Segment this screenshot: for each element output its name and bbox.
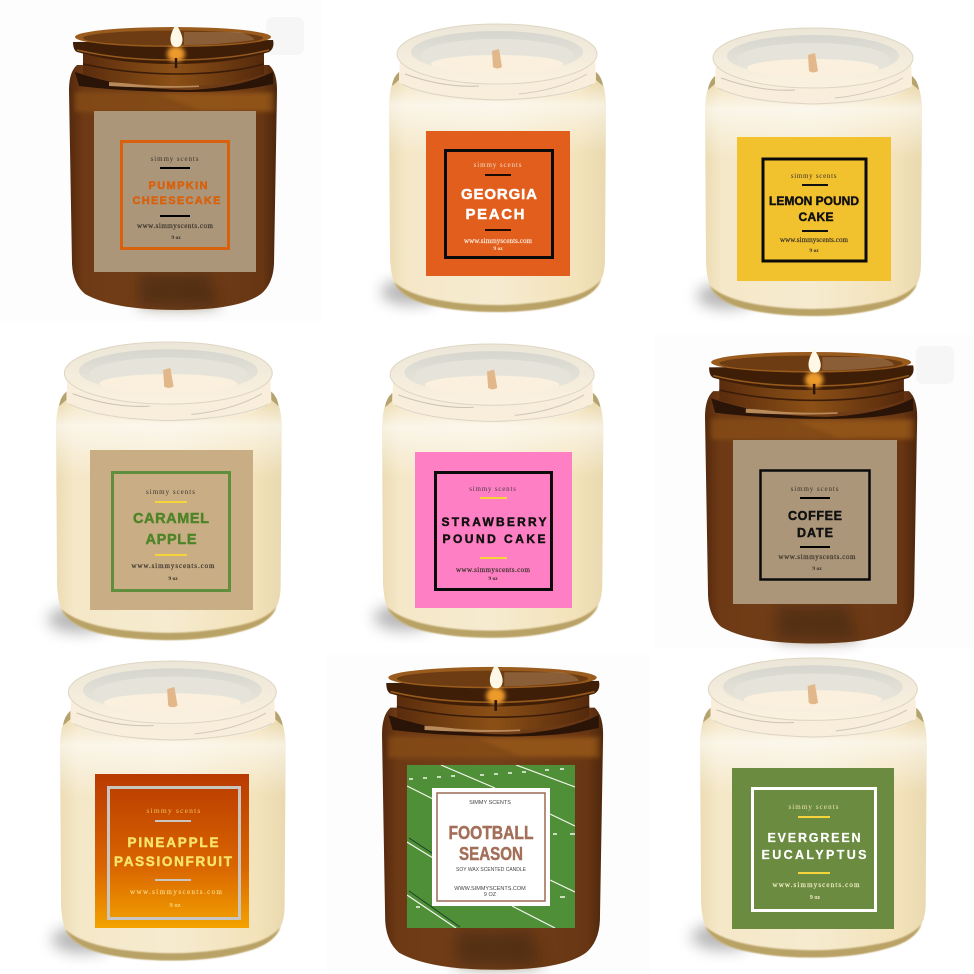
candle: caramel apple: 9 oz [168, 576, 178, 582]
candle: coffee date: DATE [797, 526, 833, 540]
candle: pineapple passionfruit [52, 661, 286, 961]
candle: lemon pound cake: CAKE [798, 210, 834, 224]
candle: pineapple passionfruit: 9 oz [169, 902, 181, 909]
candle: coffee date: COFFEE [788, 509, 842, 523]
candle: pumpkin cheesecake: CHEESECAKE [132, 195, 220, 207]
background patch: middle right [654, 335, 974, 648]
background patch: top left [0, 0, 321, 321]
candle: caramel apple: APPLE [146, 532, 197, 548]
candle: pumpkin cheesecake: 9 oz [171, 235, 181, 241]
candle: pumpkin cheesecake [69, 24, 277, 310]
candle: coffee date: www.simmyscents.com [778, 553, 856, 561]
candle: evergreen eucalyptus [692, 658, 927, 958]
candle: coffee date: 9 oz [812, 566, 822, 572]
candle: strawberry pound cake: STRAWBERRY [442, 515, 546, 529]
candle: pineapple passionfruit: www.simmyscents.com [130, 888, 223, 896]
candle: lemon pound cake [697, 28, 922, 316]
candle: caramel apple: simmy scents [146, 488, 196, 496]
candle: football season: WWW.SIMMYSCENTS.COM [454, 886, 526, 892]
candle: georgia peach: GEORGIA [461, 186, 537, 203]
candle: pumpkin cheesecake: simmy scents [151, 155, 199, 163]
candle: pumpkin cheesecake: www.simmyscents.com [137, 222, 214, 230]
faint square: middle right [916, 346, 954, 384]
candle: strawberry pound cake: 9 oz [488, 576, 498, 582]
candle: evergreen eucalyptus: EUCALYPTUS [762, 848, 866, 862]
candle: lemon pound cake: www.simmyscents.com [780, 236, 849, 244]
candle: evergreen eucalyptus: www.simmyscents.com [772, 881, 860, 889]
candle: football season: SEASON [459, 844, 523, 864]
candle: georgia peach: PEACH [466, 206, 524, 223]
candle: evergreen eucalyptus: 9 oz [810, 895, 820, 901]
candle: caramel apple: www.simmyscents.com [132, 562, 215, 570]
football field label [407, 765, 575, 928]
candle: strawberry pound cake: simmy scents [469, 485, 517, 493]
candle: coffee date: simmy scents [791, 485, 839, 493]
candle: georgia peach: 9 oz [493, 246, 503, 252]
candle: georgia peach: www.simmyscents.com [464, 237, 533, 245]
candle: caramel apple: CARAMEL [133, 511, 209, 527]
candle: strawberry pound cake [374, 344, 603, 638]
candle: football season: FOOTBALL [448, 823, 534, 843]
candle: pineapple passionfruit: simmy scents [146, 806, 202, 815]
candle: pumpkin cheesecake: PUMPKIN [148, 180, 208, 192]
candle: strawberry pound cake: www.simmyscents.com [456, 566, 531, 574]
candle: football season [382, 664, 603, 970]
candle: georgia peach [381, 24, 606, 312]
candle: georgia peach: simmy scents [474, 161, 522, 169]
candle: lemon pound cake: simmy scents [791, 172, 837, 180]
candle: evergreen eucalyptus: EVERGREEN [768, 831, 860, 845]
candle: strawberry pound cake: POUND CAKE [442, 532, 546, 546]
candle: caramel apple [48, 342, 282, 640]
candle: pineapple passionfruit: PINEAPPLE [128, 835, 218, 850]
faint square: top left [266, 17, 304, 55]
candle: football season: 9 OZ [484, 892, 497, 898]
candle: football season: SOY WAX SCENTED CANDLE [456, 867, 527, 873]
candle: pineapple passionfruit: PASSIONFRUIT [114, 854, 233, 869]
candle: lemon pound cake: LEMON POUND [769, 194, 859, 208]
candle: football season: SIMMY SCENTS [469, 800, 511, 806]
background patch: bottom centre [327, 655, 650, 974]
candle: evergreen eucalyptus: simmy scents [788, 803, 840, 811]
candle: coffee date [705, 349, 917, 643]
candle: lemon pound cake: 9 oz [809, 248, 819, 254]
